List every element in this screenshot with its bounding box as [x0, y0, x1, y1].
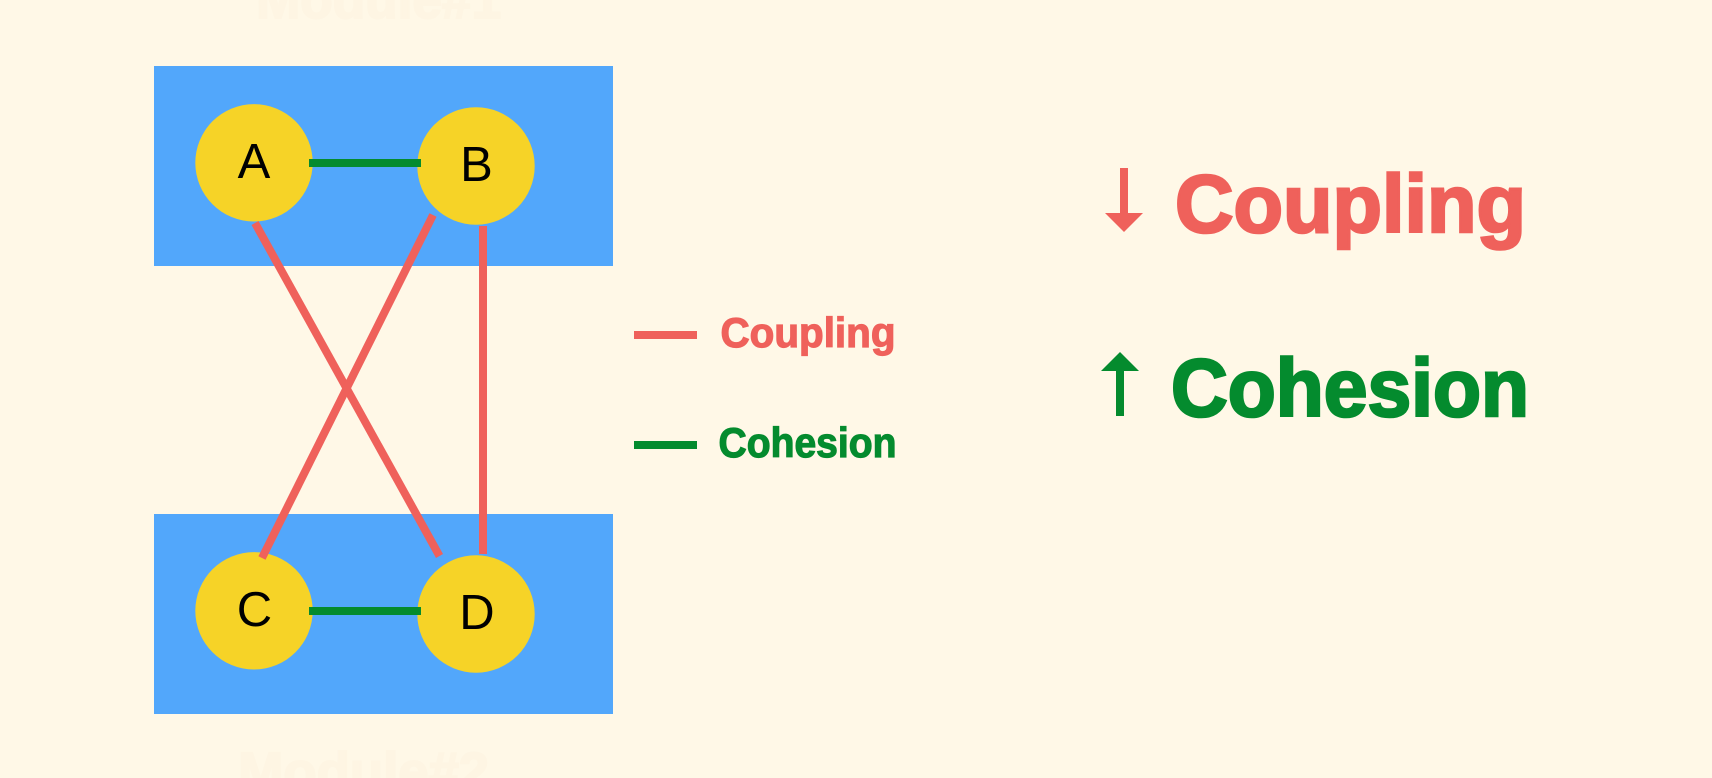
heading: cohesion: Cohesion: [1171, 343, 1529, 434]
icon: up arrow: [1101, 352, 1139, 416]
coupling link A-D: [255, 223, 440, 556]
cohesion link A-B: [309, 159, 421, 167]
node C: [195, 552, 313, 670]
coupling link B-D: [479, 226, 487, 554]
coupling link B-C: [262, 215, 433, 558]
node A: [195, 104, 313, 222]
cohesion link C-D: [309, 607, 421, 615]
node B: B: [460, 138, 493, 192]
node D: [417, 555, 535, 673]
node D: D: [459, 586, 495, 640]
node B: [417, 107, 535, 225]
legend: coupling: [634, 309, 896, 356]
node A: A: [238, 135, 271, 189]
node C: C: [237, 583, 272, 637]
legend: coupling: Coupling: [720, 309, 896, 356]
panel: module 1: [154, 66, 613, 266]
legend: cohesion: [634, 419, 896, 466]
icon: down arrow: [1105, 168, 1143, 232]
legend: cohesion: Cohesion: [718, 419, 896, 466]
panel: module 2: [154, 514, 613, 714]
heading: coupling: Coupling: [1175, 159, 1526, 250]
